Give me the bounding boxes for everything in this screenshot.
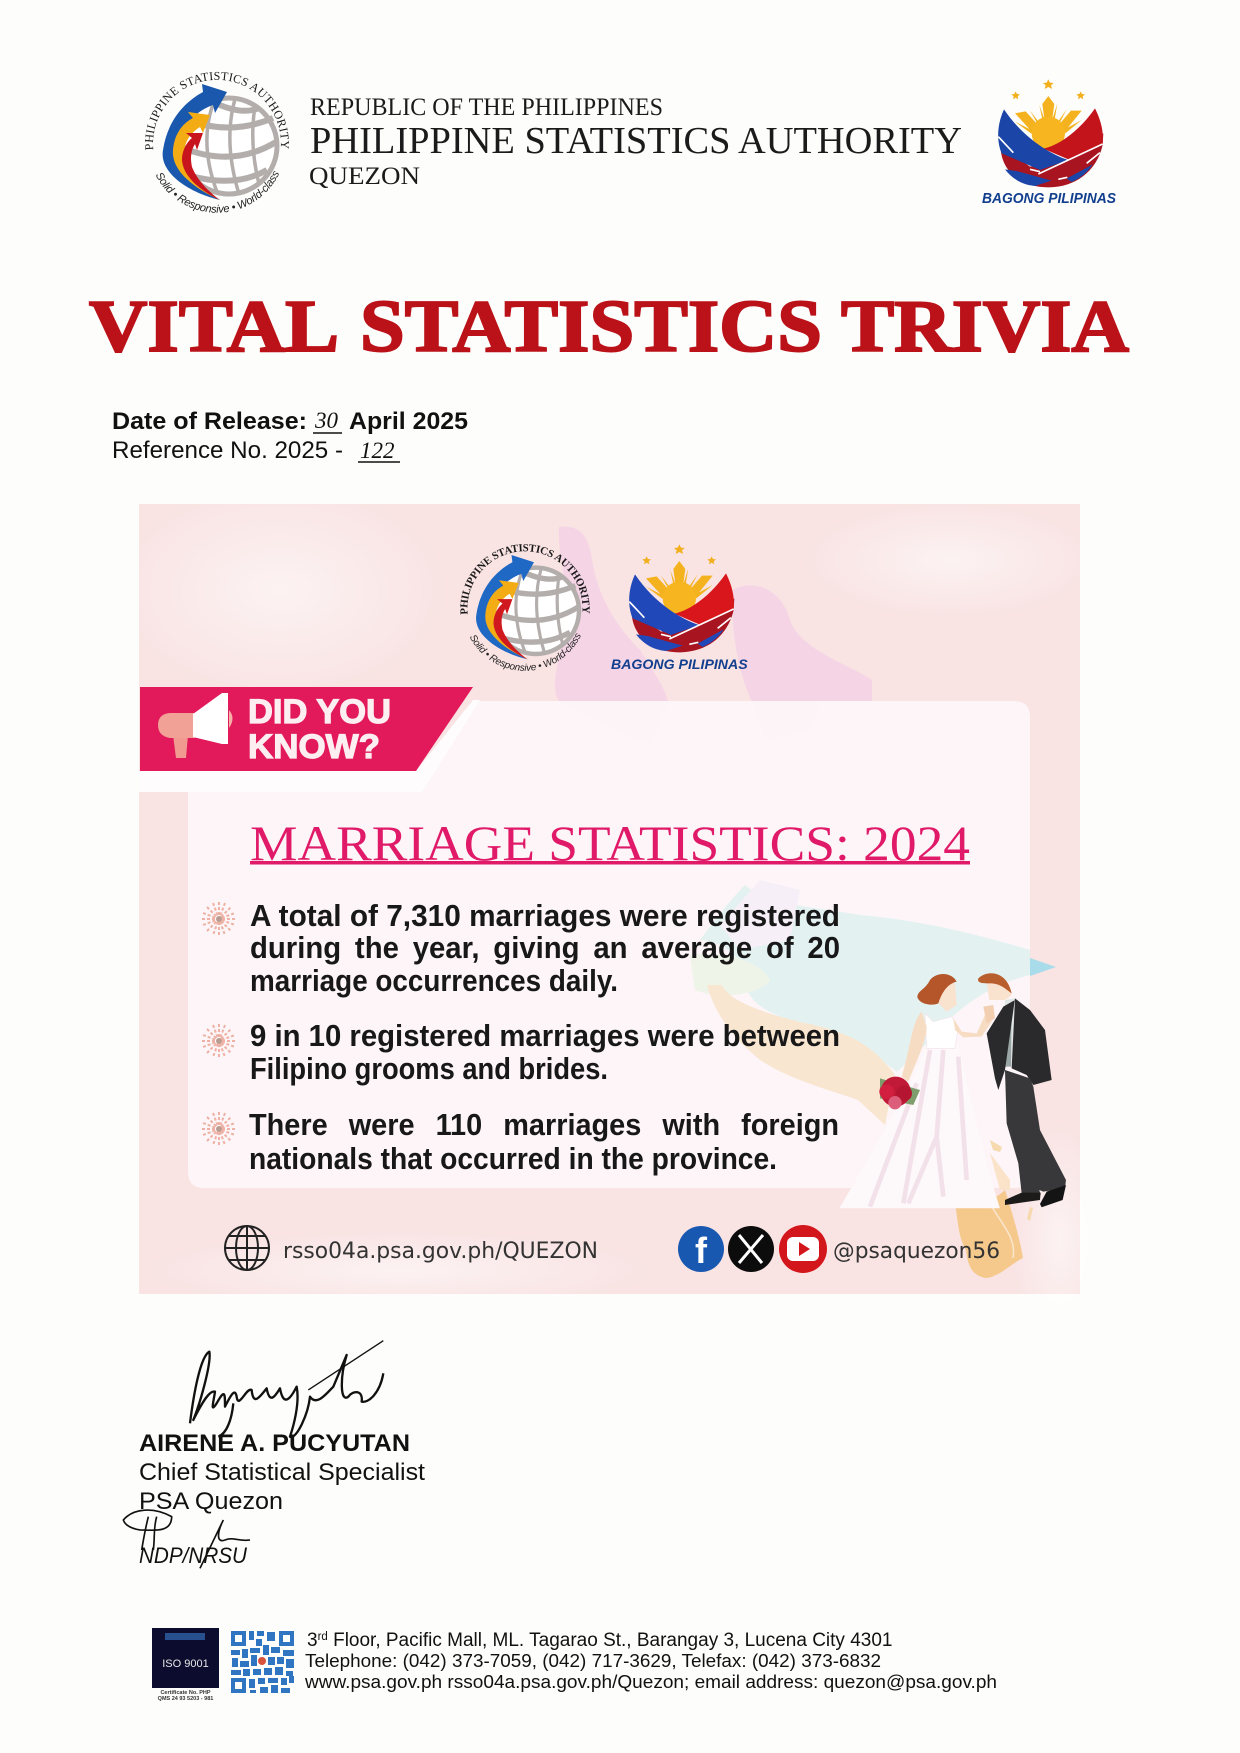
- map: lower coloured islands: [690, 880, 1056, 1278]
- initials: [123, 1510, 250, 1568]
- icon: megaphone: [158, 693, 232, 758]
- statistic text: total marriages: marriage occurrences daily.: [250, 963, 618, 998]
- bullet 3: [202, 1107, 839, 1176]
- ISO 9001 badge: QMS 24 93 5203 - 981: [158, 1696, 213, 1702]
- statistic text: total marriages: A total of 7,310 marriages were registered: [250, 898, 840, 933]
- release details: Date of Release:: [112, 408, 307, 435]
- banner: did you know: [140, 687, 473, 771]
- release details: 30: [314, 408, 338, 433]
- address text: rd: [318, 1631, 328, 1643]
- release details: [112, 408, 468, 464]
- icon: YouTube: [779, 1225, 827, 1273]
- footer social: [678, 1225, 1000, 1273]
- icon: globe: [225, 1226, 269, 1270]
- icon: facebook: f: [695, 1230, 708, 1271]
- statistic text: Filipino couples: [250, 1018, 840, 1086]
- banner text: KNOW?: [248, 728, 380, 766]
- statistic text: foreign nationals: There were 110 marriages with foreign: [249, 1107, 839, 1142]
- logo: Bagong Pilipinas, small: [611, 544, 748, 672]
- icon: facebook: [678, 1226, 724, 1272]
- name and role: NDP/NRSU: [139, 1543, 247, 1568]
- icon: X: [728, 1226, 774, 1272]
- logo: Philippine Statistics Authority seal: [145, 72, 289, 213]
- ISO 9001 badge: [152, 1628, 219, 1702]
- statistic text: foreign nationals: [249, 1107, 839, 1176]
- banner text: [248, 693, 391, 766]
- name and role: AIRENE A. PUCYUTAN: [139, 1430, 410, 1457]
- address text: 3: [307, 1630, 318, 1651]
- card: text background: [188, 701, 1030, 1188]
- panel background: [139, 504, 1080, 1294]
- banner text: DID YOU: [248, 693, 391, 731]
- title: TRIVIA: [841, 286, 1129, 368]
- statistic text: total marriages: [250, 898, 840, 998]
- address text: www.psa.gov.ph rsso04a.psa.gov.ph/Quezon; email address: quezon@psa.gov.ph: [304, 1672, 997, 1692]
- panel mottling: [110, 480, 1110, 1360]
- small seal motto: Solid • Responsive • World-class: [470, 633, 580, 671]
- strip under banner: [139, 700, 480, 792]
- social handle: @psaquezon56: [833, 1239, 1000, 1264]
- agency name text: QUEZON: [309, 163, 420, 190]
- icon: flower bullet: [202, 1112, 236, 1146]
- seal motto: Solid • Responsive • World-class: [156, 171, 279, 213]
- icon: flower bullet: [202, 1024, 236, 1058]
- statistic text: total marriages: during the year, giving an average of 20: [250, 930, 840, 965]
- name and role: [139, 1430, 425, 1568]
- release details: April 2025: [349, 408, 468, 435]
- bullet 2: [202, 1018, 840, 1086]
- agency name text: [309, 94, 962, 190]
- logo wordmark: BAGONG PILIPINAS: [982, 191, 1116, 207]
- title: STATISTICS: [360, 286, 822, 368]
- title: VITAL: [89, 286, 339, 368]
- release details: Reference No. 2025 -: [112, 437, 343, 464]
- agency name text: PHILIPPINE STATISTICS AUTHORITY: [310, 120, 962, 162]
- name and role: Chief Statistical Specialist: [139, 1459, 425, 1486]
- statistic text: Filipino couples: 9 in 10 registered marriages were between: [250, 1018, 840, 1053]
- panel: did you know infographic: [139, 504, 1080, 1294]
- icon: flower bullet: [202, 902, 236, 936]
- seal name: PHILIPPINE STATISTICS AUTHORITY: [145, 72, 289, 150]
- QR code: [231, 1631, 294, 1693]
- logo: Bagong Pilipinas: [982, 79, 1116, 207]
- small logo wordmark: BAGONG PILIPINAS: [611, 656, 748, 672]
- address text: [304, 1630, 997, 1692]
- signature: chief: [190, 1341, 383, 1437]
- map: upper pink islands: [555, 527, 872, 745]
- ISO 9001 badge: ISO 9001: [162, 1658, 209, 1670]
- small seal name: PHILIPPINE STATISTICS AUTHORITY: [460, 544, 590, 615]
- logo: PSA seal, small: [460, 544, 590, 671]
- name and role: PSA Quezon: [139, 1488, 283, 1515]
- signatory block: [123, 1341, 425, 1568]
- address text: Floor, Pacific Mall, ML. Tagarao St., Barangay 3, Lucena City 4301: [328, 1630, 892, 1651]
- agency name text: REPUBLIC OF THE PHILIPPINES: [310, 94, 663, 121]
- website address: rsso04a.psa.gov.ph/QUEZON: [283, 1239, 598, 1264]
- release details: 122: [360, 438, 394, 463]
- statistic text: foreign nationals: nationals that occurred in the province.: [249, 1141, 777, 1176]
- footer website: [225, 1226, 598, 1270]
- address text: Telephone: (042) 373-7059, (042) 717-3629, Telefax: (042) 373-6832: [305, 1651, 881, 1671]
- bullet 1: [202, 898, 840, 998]
- ISO 9001 badge: Certificate No. PHP: [160, 1690, 211, 1696]
- footer contact: [152, 1628, 997, 1702]
- statistic text: Filipino couples: Filipino grooms and brides.: [250, 1051, 608, 1086]
- title: [89, 286, 1129, 368]
- heading: marriage statistics: MARRIAGE STATISTICS: 2024: [250, 815, 970, 871]
- header: letterhead: [145, 72, 1116, 213]
- illustration: bride and groom: [839, 973, 1066, 1208]
